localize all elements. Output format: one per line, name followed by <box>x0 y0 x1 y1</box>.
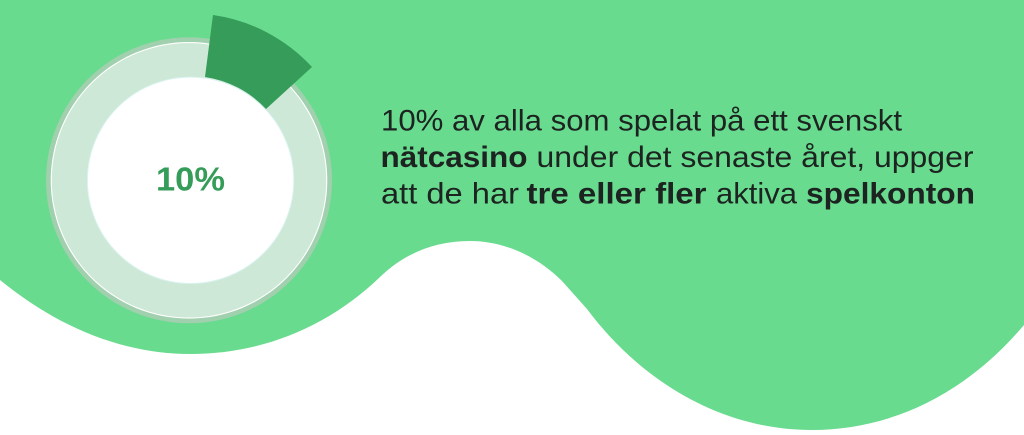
line 3 regular: aktiva <box>716 177 797 210</box>
outer ring <box>46 37 332 323</box>
line 2 bold: nätcasino <box>380 141 528 174</box>
line 2 regular: under det senaste året, uppger <box>536 141 974 174</box>
line 1: 10% av alla som spelat på ett svenskt <box>381 105 903 138</box>
line 3 bold: spelkonton <box>806 177 975 210</box>
line 3 regular: att de har <box>381 177 519 210</box>
highlighted 10% sector <box>205 15 312 109</box>
statement text <box>380 105 975 210</box>
line 3 bold: tre eller fler <box>526 177 707 210</box>
donut chart: 10% <box>46 15 332 323</box>
white ring outline <box>51 42 327 319</box>
donut centre <box>87 77 294 284</box>
donut track <box>52 43 326 318</box>
percentage label: 10% <box>156 160 225 198</box>
